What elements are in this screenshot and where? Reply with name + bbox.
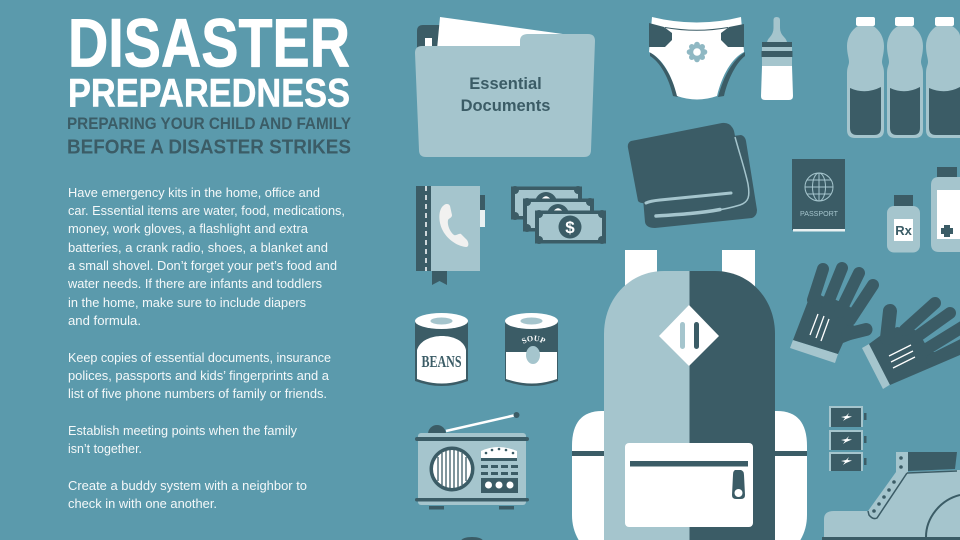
bill 1: [511, 186, 582, 220]
body text: Have emergency kits in the home, office and: [68, 185, 320, 200]
backpack badge: [659, 305, 719, 366]
body text: and formula.: [68, 313, 141, 328]
icon: diaper: [649, 17, 745, 100]
icon: soup can: SOUP: [522, 336, 546, 344]
subtitle: BEFORE A DISASTER STRIKES: [67, 136, 351, 158]
backpack side pockets: [572, 411, 807, 540]
title: DISASTER: [68, 4, 350, 82]
title: PREPAREDNESS: [68, 72, 350, 116]
icon: boot: [822, 452, 960, 540]
body text: Keep copies of essential documents, insurance: [68, 350, 331, 365]
icon: backpack: [572, 250, 807, 540]
body text: in the home, make sure to include diapers: [68, 295, 306, 310]
body text: list of five phone numbers of family or friends.: [68, 386, 327, 401]
backpack body: [604, 271, 775, 540]
body text: batteries, a crank radio, shoes, a blanket and: [68, 240, 328, 255]
body text: [67, 185, 345, 511]
water bottle 3: [926, 17, 960, 138]
icon: baby bottle: [761, 17, 793, 100]
icon: beans can: [415, 313, 468, 386]
body text: money, work gloves, a flashlight and extra: [68, 221, 309, 236]
body text: car. Essential items are water, food, medications,: [68, 203, 345, 218]
bill 2: [523, 198, 594, 232]
icon: passport: PASSPORT: [800, 209, 838, 218]
body text: check in with one another.: [68, 496, 217, 511]
icon: soup can: [505, 313, 558, 386]
icon: batteries: [829, 406, 866, 471]
battery 2: [829, 430, 866, 450]
icon: essential documents folder: Essential: [469, 75, 542, 93]
water bottle 1: [847, 17, 884, 138]
battery 1: [829, 406, 866, 427]
body text: a small shovel. Don’t forget your pet’s food and: [68, 258, 337, 273]
water bottle 2: [887, 17, 923, 138]
body text: Create a buddy system with a neighbor to: [68, 478, 307, 493]
battery 3: [829, 452, 866, 471]
bill 3: $: [565, 218, 575, 237]
icon: left glove: [790, 268, 873, 363]
icon: cash bills: [511, 186, 606, 244]
icon: beans can: BEANS: [422, 352, 462, 371]
icon: essential documents folder: [415, 17, 595, 157]
icon: essential documents folder: Documents: [461, 97, 550, 115]
backpack straps: [625, 250, 755, 290]
subtitle: PREPARING YOUR CHILD AND FAMILY: [67, 114, 352, 133]
icon: water bottles: [847, 17, 960, 138]
title: [68, 4, 350, 116]
icon: crank radio: [415, 412, 529, 510]
body text: polices, passports and kids’ fingerprints and a: [68, 368, 330, 383]
backpack front pocket: [625, 443, 753, 527]
icon: prescription bottle: Rx: [895, 223, 913, 238]
icon: partially visible item at bottom edge: [461, 537, 483, 540]
icon: prescription bottle: [887, 195, 920, 252]
icon: phone book: [416, 186, 485, 285]
icon: medicine bottle: [931, 167, 960, 252]
icon: passport: [792, 159, 845, 232]
body text: Establish meeting points when the family: [68, 423, 297, 438]
body text: isn’t together.: [68, 441, 142, 456]
icon: folded blanket: [628, 123, 757, 228]
body text: water needs. If there are infants and toddlers: [67, 276, 322, 291]
icon: right glove: [862, 303, 960, 389]
subtitle: [67, 114, 352, 158]
